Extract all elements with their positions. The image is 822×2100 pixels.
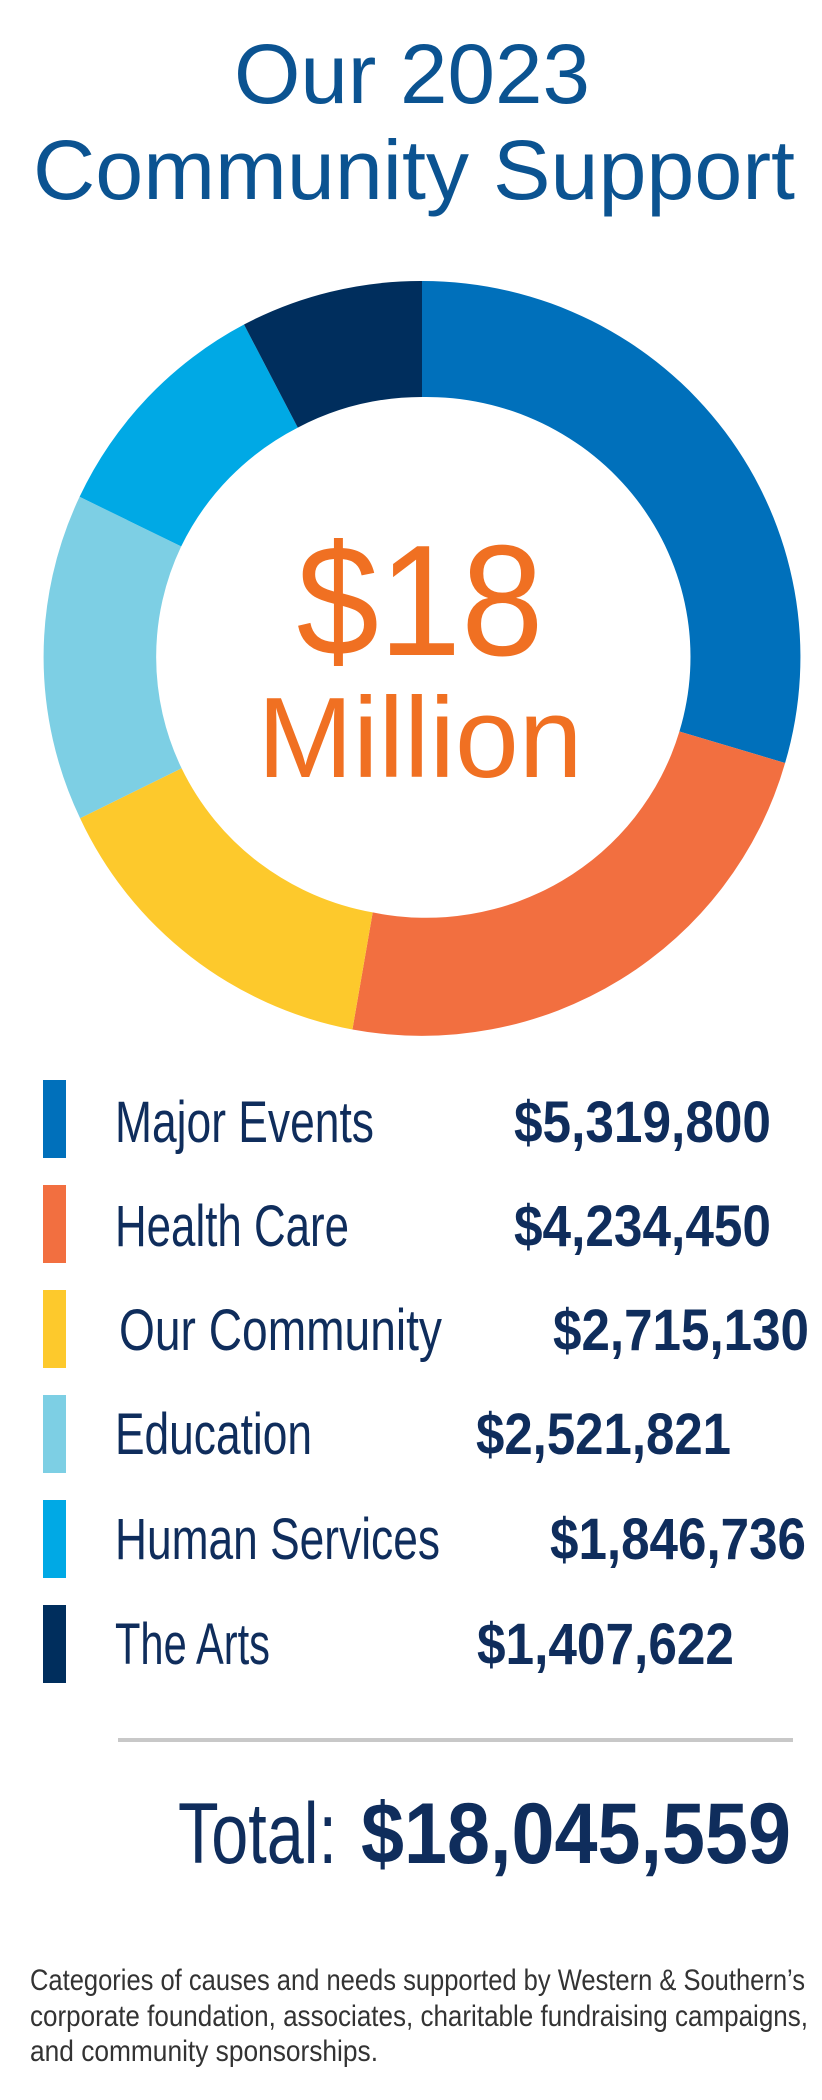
- legend row: Major Events: $5,319,800: [514, 1090, 771, 1155]
- legend row: Health Care: Health Care: [115, 1194, 349, 1259]
- legend row: Major Events: Major Events: [115, 1090, 374, 1155]
- segment: Our Community: [80, 768, 373, 1030]
- title: Our 2023: [234, 27, 590, 121]
- title: Community Support: [33, 123, 795, 217]
- footnote: and community sponsorships.: [30, 2035, 378, 2068]
- total: [178, 1786, 791, 1882]
- center label: Million: [258, 675, 582, 802]
- segment: Education: [44, 497, 182, 818]
- legend row: Health Care: $4,234,450: [514, 1194, 771, 1259]
- legend row: The Arts: $1,407,622: [477, 1612, 734, 1677]
- footnote: [30, 1964, 808, 2068]
- donut chart: [44, 281, 800, 1036]
- legend row: Major Events: [43, 1080, 771, 1158]
- segment: Major Events: [422, 281, 800, 763]
- legend row: Education: [43, 1395, 731, 1473]
- segment: The Arts: [244, 281, 422, 428]
- legend row: The Arts: [43, 1605, 734, 1683]
- center label: $18: [296, 513, 544, 689]
- legend row: Human Services: [43, 1500, 806, 1578]
- legend row: Education: $2,521,821: [476, 1402, 731, 1467]
- segment: Human Services: [80, 324, 298, 546]
- total: Total:: [178, 1786, 337, 1882]
- legend: [43, 1080, 809, 1683]
- legend row: Health Care: [43, 1185, 771, 1263]
- segment: Health Care: [352, 732, 785, 1036]
- legend row: Human Services: Human Services: [115, 1507, 440, 1572]
- legend row: Education: Education: [115, 1402, 312, 1467]
- legend row: Our Community: Our Community: [119, 1298, 442, 1363]
- legend row: Our Community: [43, 1290, 809, 1368]
- legend row: The Arts: The Arts: [115, 1612, 270, 1677]
- center label: [258, 513, 582, 802]
- title: [33, 27, 795, 217]
